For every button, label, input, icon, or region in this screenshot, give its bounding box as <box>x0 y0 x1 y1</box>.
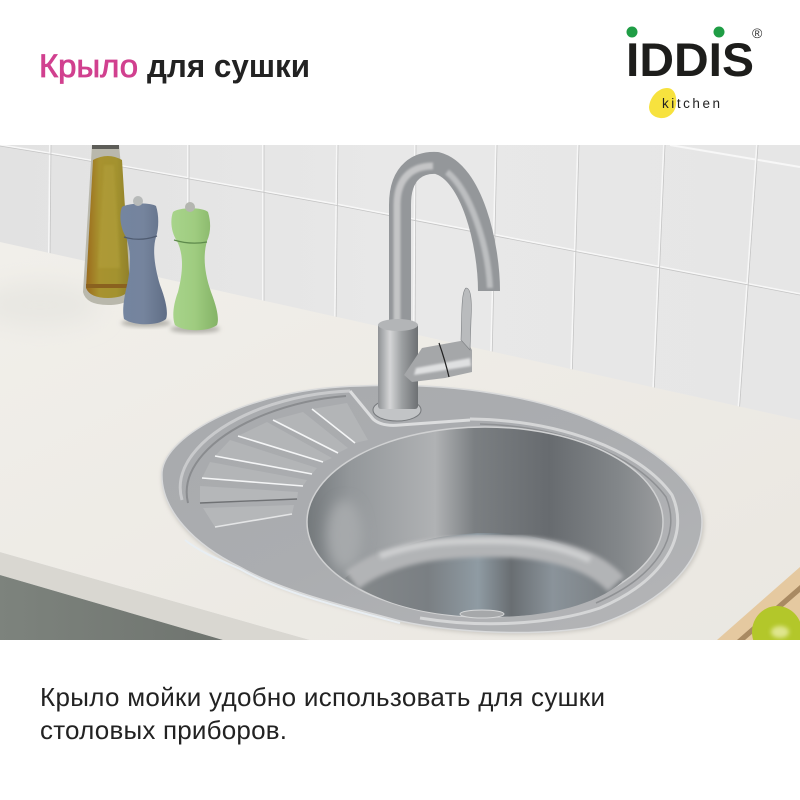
green pepper mill <box>170 202 220 333</box>
title accent word: Крыло <box>39 48 138 84</box>
registered mark: ® <box>752 25 763 41</box>
faucet spout <box>400 163 489 330</box>
faucet base flange <box>373 399 421 421</box>
oil bottle <box>83 145 133 305</box>
board surface <box>717 567 800 640</box>
faucet deck outline <box>350 391 470 425</box>
logo kitchen label: kitchen <box>662 96 720 111</box>
rib highlights <box>202 409 355 486</box>
green mill seam <box>174 240 207 243</box>
bottle oil <box>86 156 130 298</box>
logo green dot left <box>626 26 638 38</box>
spout highlight left <box>397 166 433 325</box>
counter front edge <box>0 552 310 640</box>
faucet column top <box>378 319 418 331</box>
bottle inner highlight <box>115 221 118 266</box>
blue mill shadow <box>121 319 171 327</box>
bottle base band <box>86 284 130 288</box>
title <box>39 48 310 84</box>
drainer ribs <box>200 403 368 527</box>
rib panel 2 <box>273 412 348 453</box>
drainer rim shadow <box>187 396 346 503</box>
faucet lever body <box>404 340 472 382</box>
under counter cabinet <box>0 575 223 640</box>
bottle glass <box>83 145 133 305</box>
rib panel 5 <box>202 462 307 486</box>
spout highlight right <box>447 172 490 288</box>
rib panel 3 <box>238 422 332 462</box>
bowl floor <box>345 533 622 617</box>
lime highlight <box>771 626 789 638</box>
description line 2: столовых приборов. <box>40 715 287 745</box>
logo green dot right <box>714 26 724 38</box>
description line 1: Крыло мойки удобно использовать для сушки <box>40 682 605 712</box>
blue mill body <box>120 203 167 324</box>
sink bright lower rim <box>185 540 400 623</box>
rib panel 1 <box>312 403 368 443</box>
blue mill knob <box>133 196 143 206</box>
bowl left lighter area <box>327 500 363 570</box>
right rim ring shadow <box>480 424 671 603</box>
counter reflection <box>20 300 60 310</box>
sink <box>162 385 704 635</box>
wall base <box>0 145 800 435</box>
blue pepper mill <box>120 196 171 327</box>
board groove <box>737 585 800 640</box>
lime <box>752 606 800 640</box>
faucet column <box>378 323 418 409</box>
logo yellow blob <box>649 88 676 118</box>
rib panel 7 <box>203 505 294 527</box>
green mill body <box>171 208 218 330</box>
sink shadow <box>160 462 706 636</box>
tile grout vertical <box>49 145 757 415</box>
logo wordmark: IDDIS <box>626 33 754 86</box>
rib lower shadow <box>200 499 297 503</box>
bowl drain <box>460 610 504 618</box>
faucet <box>373 163 490 421</box>
grout shading <box>0 145 800 415</box>
green mill shadow <box>170 325 220 333</box>
rib lower highlight <box>215 514 292 527</box>
bowl wall <box>307 427 663 617</box>
tile grout horizontal <box>0 145 800 294</box>
rib panel 6 <box>200 486 298 503</box>
blue mill seam <box>124 236 157 239</box>
bowl <box>307 427 663 618</box>
rib panel 4 <box>215 440 317 474</box>
bowl curved ring <box>352 546 616 584</box>
logo: IDDIS kitchen <box>626 25 763 118</box>
ring highlight <box>380 541 590 560</box>
tiled wall <box>0 145 800 435</box>
countertop <box>0 242 800 640</box>
photo: kitchen sink scene <box>0 145 800 658</box>
faucet lever seam <box>439 343 449 377</box>
title dark words: для сушки <box>147 48 310 84</box>
description text <box>40 682 605 745</box>
right rim ring <box>420 419 678 624</box>
bottle neck dark <box>92 145 119 149</box>
faucet body highlight <box>414 358 471 375</box>
green mill knob <box>185 202 195 212</box>
sink plate <box>162 385 702 633</box>
faucet lever handle <box>461 288 471 350</box>
cutting board <box>717 567 800 640</box>
drainer raised rim <box>180 391 350 500</box>
